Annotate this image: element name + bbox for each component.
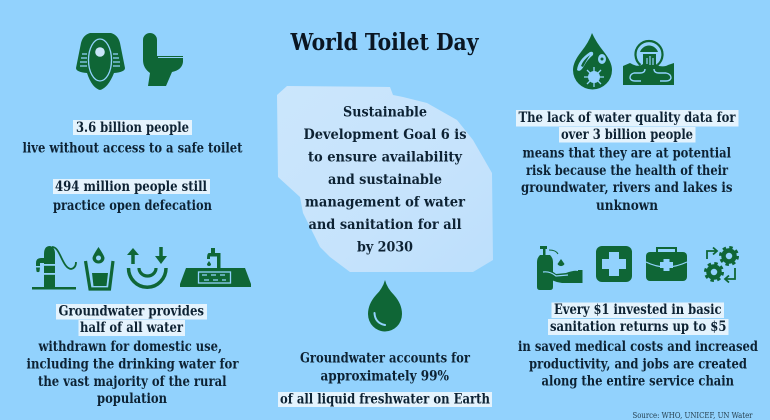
goal text: management of water bbox=[305, 194, 465, 210]
text: 3.6 billion people: live without access to a safe toilet bbox=[22, 140, 243, 156]
text: groundwater provides: the vast majority of the rural bbox=[38, 374, 227, 390]
text: lack of water quality data: over 3 billion people bbox=[561, 127, 693, 143]
icon: drop with germs bbox=[573, 33, 612, 90]
text: groundwater accounts: approximately 99% bbox=[320, 368, 449, 384]
title: World Toilet Day bbox=[290, 29, 479, 56]
text: 3.6 billion people: 3.6 billion people bbox=[76, 120, 189, 136]
text: groundwater provides: Groundwater provides bbox=[58, 304, 204, 320]
text: groundwater provides: withdrawn for domestic use, bbox=[38, 339, 222, 355]
icon: squat toilet bbox=[76, 33, 125, 90]
icon: gears and arrows bbox=[706, 248, 738, 282]
icon: tap and trough bbox=[180, 248, 251, 287]
icon: hand pump bbox=[32, 246, 76, 290]
text: 3.6 billion people bbox=[22, 120, 243, 156]
icon: water cycle arrows bbox=[127, 247, 167, 287]
icon: first aid sign bbox=[596, 246, 632, 282]
icon: medical briefcase bbox=[646, 248, 687, 281]
text: lack of water quality data: unknown bbox=[596, 198, 658, 214]
icon: pipe into ground bbox=[623, 41, 674, 85]
blob background bbox=[277, 86, 493, 272]
text: 494 million people: practice open defecation bbox=[53, 198, 212, 214]
text: lack of water quality data bbox=[516, 110, 738, 214]
text: every $1 invested: Every $1 invested in basic bbox=[554, 302, 722, 318]
text: groundwater accounts: Groundwater accounts for bbox=[300, 350, 470, 366]
goal text bbox=[304, 104, 467, 256]
text: groundwater provides: including the drinking water for bbox=[26, 356, 239, 372]
panel: sustainable development goal 6 bbox=[277, 86, 493, 272]
icon: soap and hand bbox=[537, 246, 582, 290]
text: groundwater provides: population bbox=[97, 391, 167, 407]
goal text: and sanitation for all bbox=[308, 217, 462, 233]
icon: drop bbox=[368, 280, 402, 332]
goal text: by 2030 bbox=[357, 240, 413, 256]
goal text: Development Goal 6 is bbox=[304, 127, 467, 143]
text: groundwater accounts: of all liquid freshwater on Earth bbox=[280, 392, 490, 408]
goal text: and sustainable bbox=[328, 172, 442, 188]
text: 494 million people: 494 million people still bbox=[55, 179, 207, 195]
goal text: to ensure availability bbox=[308, 150, 463, 166]
text: groundwater accounts bbox=[278, 350, 492, 408]
text: groundwater provides bbox=[26, 304, 239, 407]
text: 494 million people bbox=[53, 179, 212, 214]
text: lack of water quality data: risk because the health of their bbox=[526, 163, 728, 179]
text: every $1 invested bbox=[518, 302, 758, 390]
icon: cup with drop bbox=[86, 247, 113, 289]
text: groundwater provides: half of all water bbox=[80, 320, 183, 336]
text: lack of water quality data: groundwater, rivers and lakes is bbox=[521, 180, 732, 196]
goal text: Sustainable bbox=[343, 104, 427, 120]
icon: toilet bbox=[143, 33, 183, 86]
text: every $1 invested: sanitation returns up to $5 bbox=[550, 319, 726, 335]
